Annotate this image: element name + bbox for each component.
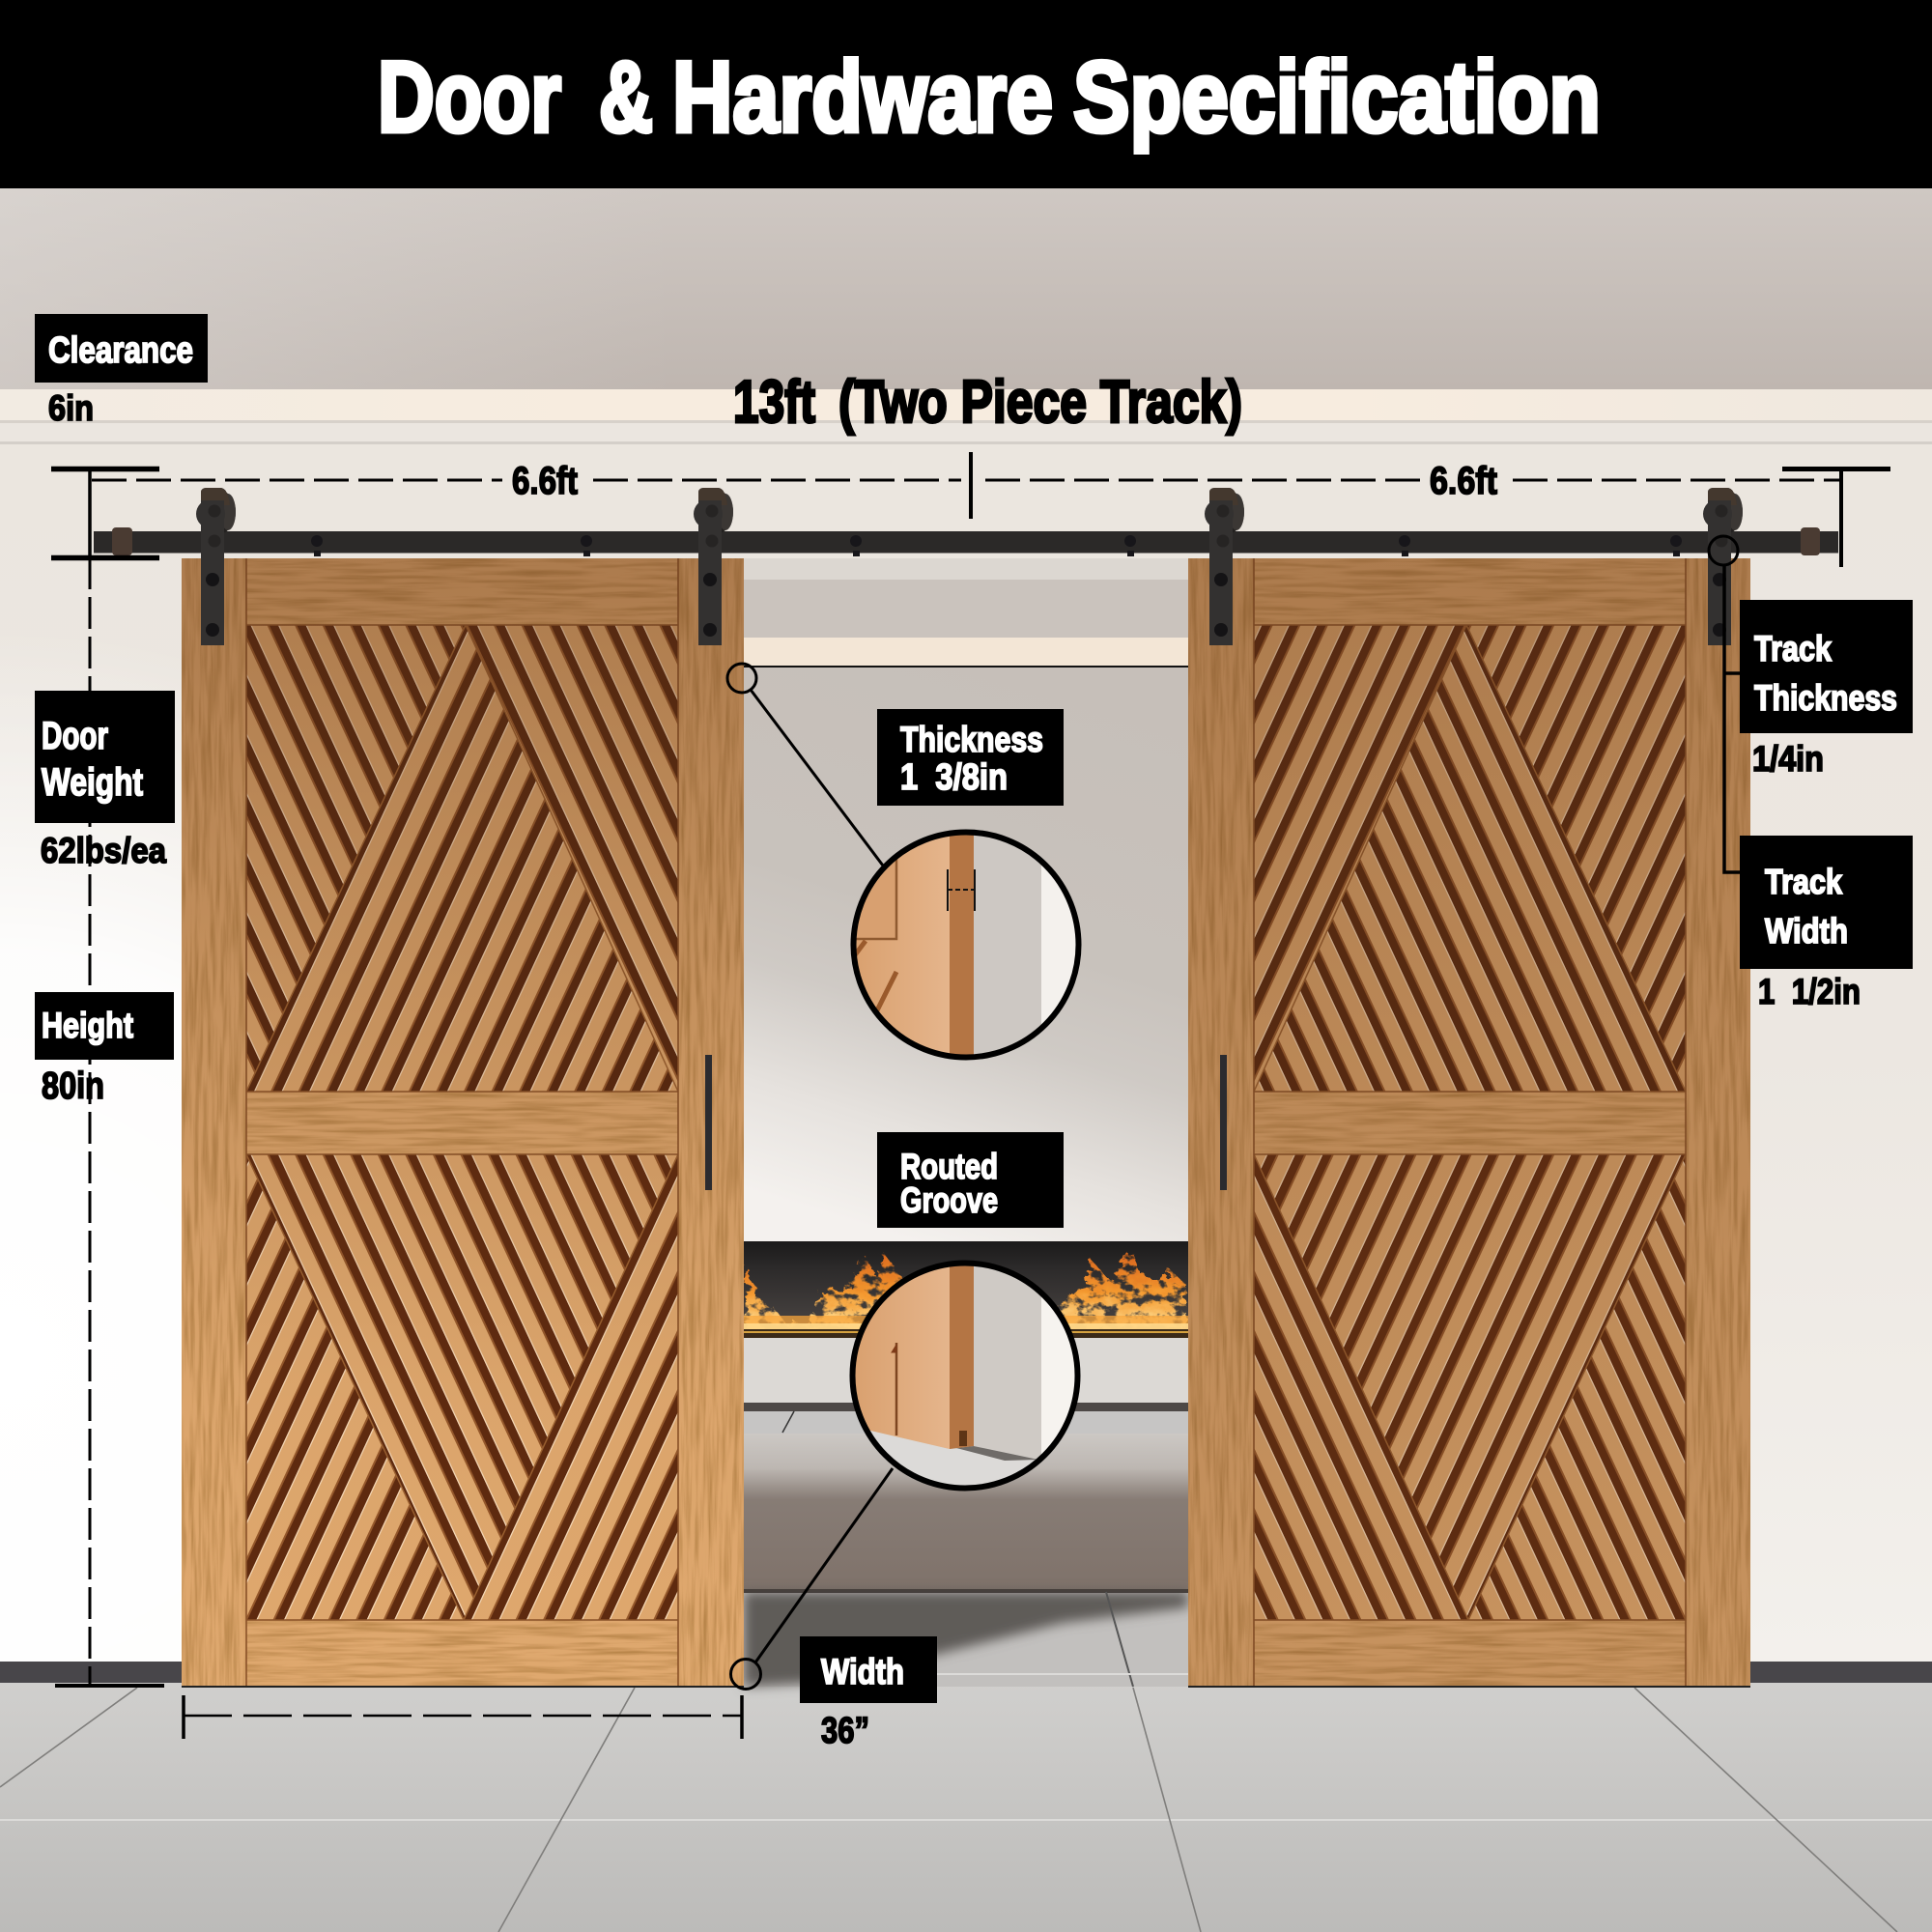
track thickness callout: Thickness [1754, 678, 1897, 718]
left section length: 6.6ft [512, 460, 578, 502]
track length label [733, 369, 1242, 436]
title: Door [378, 42, 561, 154]
header bar [0, 0, 1932, 188]
width callout [800, 1636, 937, 1751]
width dimension line [184, 1695, 742, 1739]
title: Hardware [672, 42, 1053, 154]
thickness leader line [727, 664, 883, 866]
magnifier: routed groove [850, 1260, 1082, 1492]
hanger straps and wheels [196, 488, 1743, 645]
door handle [705, 1055, 712, 1190]
track thickness callout [1740, 600, 1913, 779]
rug [744, 1434, 1188, 1590]
track width callout: Width [1765, 911, 1848, 951]
door weight callout: Weight [42, 761, 143, 804]
title [378, 42, 1601, 154]
thickness callout [877, 709, 1064, 806]
track length label: (Two Piece Track) [838, 369, 1242, 436]
track thickness callout: 1/4in [1752, 739, 1824, 779]
doorway opening with back room [744, 558, 1188, 1687]
track width callout: Track [1765, 862, 1843, 901]
door weight callout [35, 691, 175, 870]
track width callout [1740, 836, 1913, 1011]
height callout [35, 992, 174, 1107]
routed groove callout: Routed [900, 1147, 998, 1186]
track leader line [1709, 536, 1740, 872]
title: Specification [1073, 42, 1601, 154]
clearance callout: Clearance [48, 330, 193, 371]
track bolts [311, 535, 1682, 556]
overall track dimension lines [92, 452, 1890, 567]
sliding track rail [94, 527, 1838, 556]
height and clearance dimension lines [51, 469, 164, 1686]
clearance callout: 6in [48, 388, 94, 428]
door handle [1220, 1055, 1227, 1190]
door weight callout: Door [42, 715, 108, 757]
routed groove callout: Groove [900, 1180, 998, 1220]
track length label: 13ft [733, 369, 815, 436]
title: & [599, 42, 653, 154]
right barn door [1176, 558, 1759, 1688]
width callout: 36” [821, 1711, 869, 1751]
track width callout: 1 1/2in [1758, 972, 1861, 1011]
width callout: Width [821, 1652, 904, 1691]
width leader line [730, 1468, 893, 1689]
left barn door [173, 558, 756, 1688]
thickness callout: Thickness [900, 720, 1043, 759]
door weight callout: 62lbs/ea [41, 831, 166, 870]
height callout: 80in [42, 1065, 104, 1107]
track stoppers [112, 527, 1820, 555]
clearance callout [35, 314, 208, 428]
height callout: Height [42, 1006, 133, 1045]
routed groove callout [877, 1132, 1064, 1228]
track thickness callout: Track [1754, 629, 1832, 668]
fireplace [744, 1241, 1188, 1411]
thickness callout: 1 3/8in [900, 757, 1008, 798]
right section length: 6.6ft [1430, 460, 1497, 502]
magnifier: door thickness [850, 829, 1082, 1061]
